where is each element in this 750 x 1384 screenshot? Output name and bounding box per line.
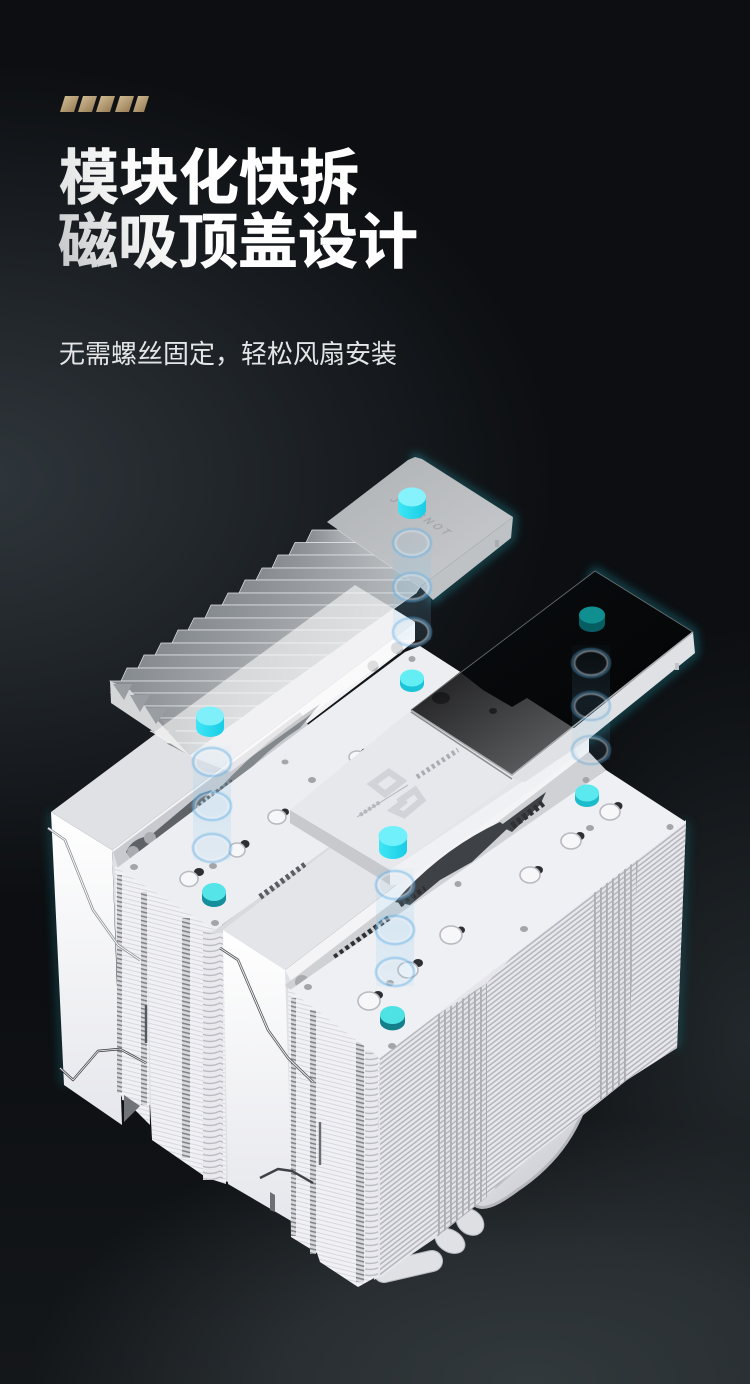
wires of the center fan xyxy=(220,948,320,1183)
tower 2 top face xyxy=(223,698,589,970)
left fan tower xyxy=(51,585,415,1125)
tower 2 lower notch xyxy=(270,1192,275,1212)
teal magnet xyxy=(579,615,605,632)
flat magnets on the plates xyxy=(202,670,599,1030)
wires of the left fan xyxy=(48,828,146,1080)
heatsink 1 lower gap xyxy=(124,1095,140,1122)
title xyxy=(58,145,418,276)
rings xyxy=(572,649,610,764)
cover front zigzag xyxy=(110,681,190,756)
cyan edge glow around the cooler parts xyxy=(51,457,695,1085)
left heatsink fin stack xyxy=(115,866,226,1184)
screw bumps with keyholes xyxy=(180,748,622,1010)
cyan magnet xyxy=(379,836,407,859)
magnet column: top cover xyxy=(393,488,431,646)
tower 2 front face xyxy=(223,930,293,1222)
cover side strip xyxy=(420,517,513,600)
wire clip xyxy=(319,1122,321,1165)
glass clip xyxy=(675,663,679,670)
cyan magnet xyxy=(398,497,426,519)
black glass cover xyxy=(411,571,695,782)
center cover side xyxy=(290,810,390,885)
light base behind the towers and fin stacks xyxy=(112,850,380,1287)
plate 1 holes xyxy=(130,656,416,926)
decorative gold stripes xyxy=(60,96,149,112)
tower 2 fan gap xyxy=(285,752,606,992)
cover flat end xyxy=(327,457,513,587)
tower 2 side rail xyxy=(285,738,589,985)
plate 2 holes xyxy=(304,777,674,1049)
tower 1 front face xyxy=(51,812,122,1125)
center fan tower xyxy=(223,698,606,1222)
front heatsink xyxy=(288,770,686,1287)
heatsink 2 right face sections xyxy=(380,822,686,1278)
rings xyxy=(193,748,231,862)
center cover top xyxy=(290,710,515,870)
center magnetic cover with logo xyxy=(290,710,589,885)
heatsink 2 top plate xyxy=(290,770,686,1058)
wire clip xyxy=(145,1005,147,1043)
left heatsink top plate xyxy=(117,646,518,930)
magnet column: front xyxy=(376,826,414,986)
gray finned top cover with magnets xyxy=(110,457,513,772)
center cover right body xyxy=(390,737,589,885)
tower 1 fan gap xyxy=(113,642,403,868)
cover fins xyxy=(110,530,420,756)
printed logo xyxy=(372,772,422,815)
tower 1 top face xyxy=(51,585,415,850)
heat pipes xyxy=(384,1105,572,1272)
subtitle: 无需螺丝固定，轻松风扇安装 xyxy=(59,339,397,369)
glass reflections xyxy=(432,692,450,704)
title: 磁吸顶盖设计 xyxy=(58,209,418,276)
heatsink 1 dark jagged columns xyxy=(117,875,122,1093)
heatsink 2 left face xyxy=(288,988,380,1287)
rings xyxy=(376,871,414,986)
rings xyxy=(393,529,431,646)
magnet column: glass cover xyxy=(572,606,610,764)
cover brand mark: JONSNOT xyxy=(386,496,456,538)
cover clip xyxy=(495,540,499,547)
heatsink 1 side fins xyxy=(115,866,150,1125)
white overlap of the cover on the tower xyxy=(153,585,415,772)
cyan magnet xyxy=(196,716,224,737)
glass over the white plate xyxy=(411,672,572,775)
tower 1 side rail xyxy=(112,622,415,868)
glass edge xyxy=(411,632,693,775)
magnet column: left xyxy=(193,706,231,862)
glass side strip xyxy=(512,632,695,782)
glass top xyxy=(411,571,693,775)
gap fill between plate 1 and tower 2 xyxy=(210,696,530,934)
heatsink 2 right face base xyxy=(374,820,686,1280)
plate 1 sawtooth edge xyxy=(260,864,306,897)
title: 模块化快拆 xyxy=(59,145,359,212)
